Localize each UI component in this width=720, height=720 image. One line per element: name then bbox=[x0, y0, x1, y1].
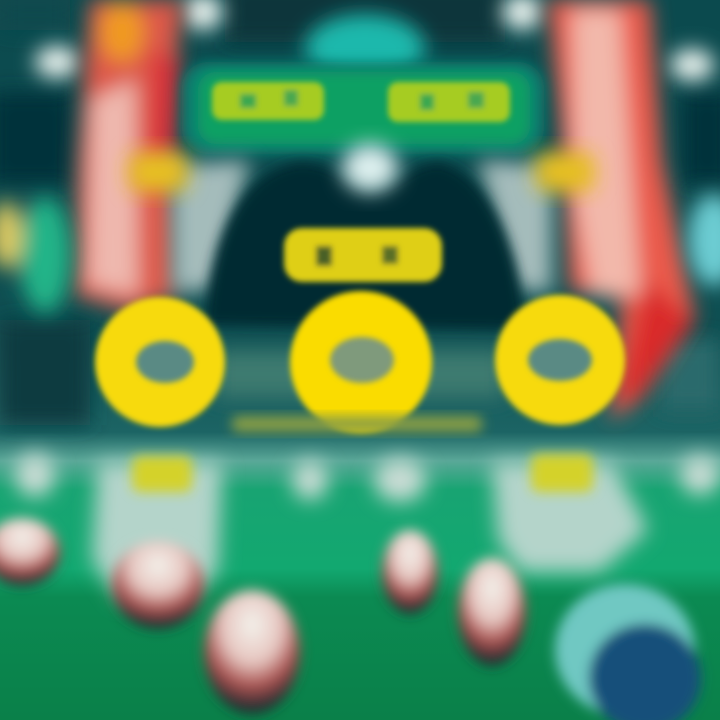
panel: lower right pale card bbox=[492, 462, 648, 572]
icon: teal top shape bbox=[305, 14, 425, 82]
connector band between circles bbox=[215, 350, 505, 398]
panel: top green banner bbox=[182, 62, 544, 154]
circle: left badge bbox=[95, 297, 225, 427]
label: lower-right yellow bbox=[531, 454, 593, 492]
panel: lower left pale card bbox=[92, 462, 222, 600]
caption: blurred line under circles bbox=[232, 416, 482, 432]
heading: left blurred word bbox=[212, 82, 324, 120]
balls on the field bbox=[0, 518, 526, 714]
icon: white glow above centre bbox=[342, 144, 398, 192]
left edge colour accents bbox=[0, 194, 720, 313]
circle: right badge bbox=[495, 295, 625, 425]
panel: right red banner bbox=[548, 0, 695, 420]
label: lower-left yellow bbox=[132, 456, 192, 492]
circle: centre badge bbox=[290, 291, 432, 433]
large blue ball bbox=[555, 584, 701, 720]
background: top dark panels and side tones bbox=[0, 0, 720, 425]
decorative white spots on field bbox=[15, 453, 720, 502]
panel: central dark shape bbox=[205, 162, 525, 330]
heading: right blurred word bbox=[388, 82, 510, 122]
panel: left red banner bbox=[74, 0, 182, 312]
decorative white highlights bbox=[35, 0, 714, 81]
panel: pale side glass shapes bbox=[172, 160, 552, 292]
label: top-right yellow bbox=[535, 152, 595, 192]
main value: blurred yellow figure bbox=[284, 228, 442, 282]
label: top-left yellow bbox=[128, 152, 188, 192]
